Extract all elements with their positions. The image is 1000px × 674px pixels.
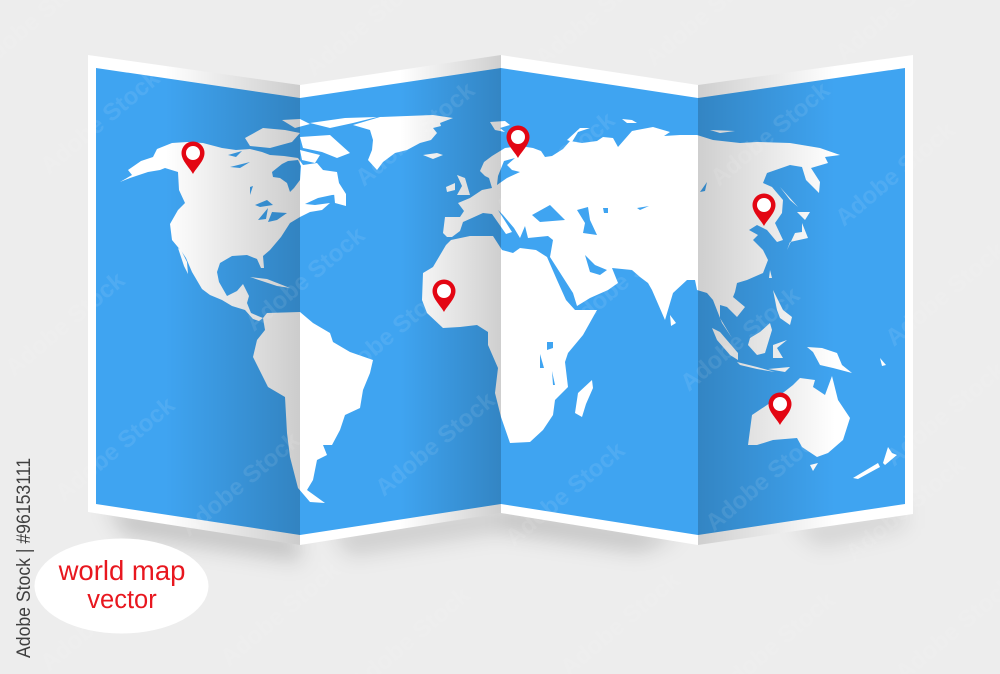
icon: map pin, Australia [768,392,792,425]
watermark: Adobe Stock [490,106,621,222]
Baltic Sea [497,158,520,185]
watermark: Adobe Stock [500,436,631,552]
icon: map pin, East Asia [752,194,776,226]
watermark: Adobe Stock [175,426,306,542]
watermark: Adobe Stock [50,391,181,507]
world map landmasses [120,115,897,503]
Iceland [423,153,443,159]
Great Lakes and Canadian lakes [228,151,287,222]
watermark: Adobe Stock [325,276,456,392]
watermark: Adobe Stock [705,76,836,192]
title badge [34,538,208,634]
icon: map pin, Canada [182,142,204,174]
Australia [748,376,850,457]
Greenland [353,115,453,170]
watermark: Adobe Stock [0,266,131,382]
title badge: vector [87,586,157,614]
New Zealand and Tasmania [810,447,897,479]
North America [120,142,346,321]
Central Asian lakes [603,182,707,213]
British Isles [446,175,470,195]
Africa [422,236,597,443]
watermark: Adobe Stock [700,421,831,537]
Arctic Eurasian islands [490,119,735,142]
South America [253,312,373,503]
Eurasia [443,127,840,338]
watermark: Adobe Stock [560,221,691,337]
Asian and Pacific islands [250,187,886,373]
folded map paper [88,55,913,545]
watermark: Adobe Stock [35,561,166,674]
African lakes [540,342,555,385]
icon: map pin, Scandinavia [506,126,530,158]
watermark: Adobe Stock [240,221,371,337]
Caspian Sea [577,207,597,235]
Persian Gulf [585,255,607,275]
Black Sea [532,205,565,222]
paper shadows below the folded map [105,505,905,562]
watermark: Adobe Stock [370,386,501,502]
icon: map pin, West Africa [432,280,456,312]
inland seas and lakes [228,151,707,385]
vertical stock caption: Adobe Stock | #96153111 [14,458,35,658]
watermark: Adobe Stock [840,451,971,567]
Arctic islands [245,117,377,206]
fold shading [88,55,913,545]
Baja California [178,248,188,274]
watermark: Adobe Stock [675,281,806,397]
ocean panels [96,68,905,535]
watermark: Adobe Stock [350,76,481,192]
watermark: Adobe Stock [830,116,961,232]
Hudson Bay [272,160,301,192]
watermark: Adobe Stock [35,64,166,180]
Madagascar [575,380,593,417]
title badge: world map [58,555,185,586]
watermark: Adobe Stock [215,556,346,672]
